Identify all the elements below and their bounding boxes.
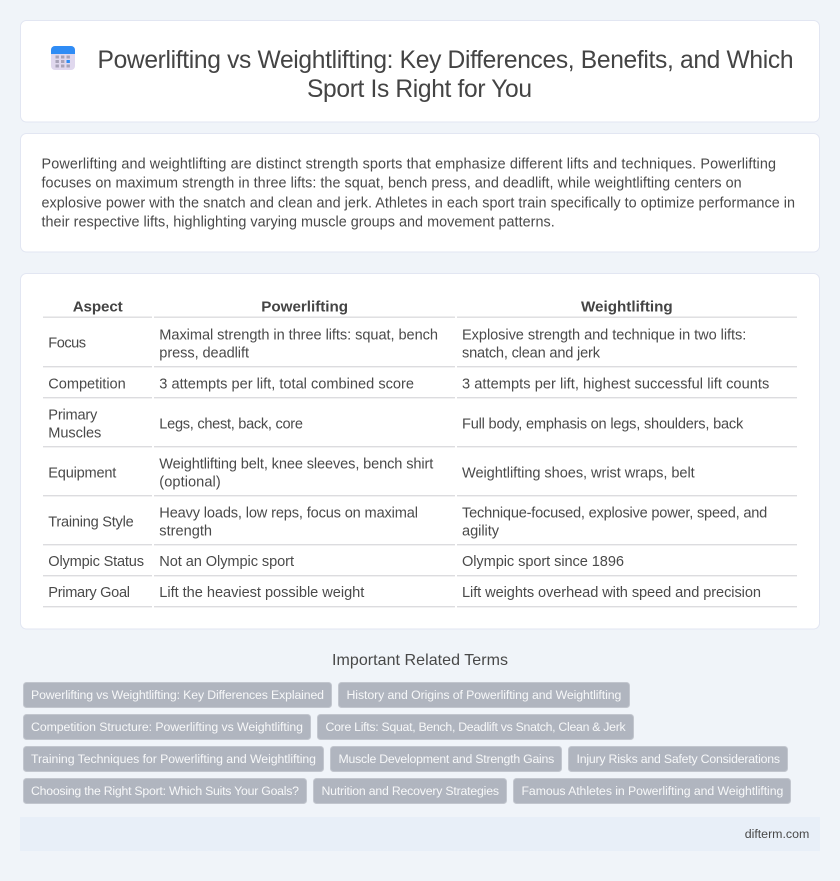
icon: calendar	[51, 46, 75, 70]
tag	[338, 682, 630, 708]
text block: introduction paragraph: their respective lifts, highlighting varying muscle groups and movement patterns.	[42, 215, 555, 231]
tag: Training Techniques for Powerlifting and Weightlifting	[31, 752, 316, 766]
tag: Famous Athletes in Powerlifting and Weightlifting	[522, 784, 783, 798]
table row: competition: Competition	[48, 376, 126, 392]
footer	[20, 817, 820, 851]
panel: introduction	[20, 134, 820, 252]
table row: competition	[43, 376, 797, 398]
table row: equipment: (optional)	[159, 474, 221, 490]
table row: olympic status	[43, 554, 797, 576]
table row: primary goal: Lift weights overhead with speed and precision	[462, 585, 761, 601]
table row: competition: 3 attempts per lift, total combined score	[159, 376, 414, 392]
table row: training style: Technique-focused, explosive power, speed, and	[462, 505, 767, 521]
table row: primary muscles: Full body, emphasis on legs, shoulders, back	[462, 416, 744, 432]
tag	[568, 746, 788, 772]
tag: Choosing the Right Sport: Which Suits Your Goals?	[31, 784, 299, 798]
title: Sport Is Right for You	[307, 76, 532, 103]
tag	[24, 746, 324, 772]
table row: training style	[43, 505, 797, 545]
panel: comparison table	[20, 274, 820, 629]
tag: Muscle Development and Strength Gains	[338, 752, 554, 766]
tag	[24, 682, 332, 708]
tag	[514, 778, 790, 804]
tag	[318, 714, 634, 740]
table row: training style: Heavy loads, low reps, focus on maximal	[159, 505, 418, 521]
title	[98, 47, 794, 103]
text block: introduction paragraph: explosive power with the snatch and clean and jerk. Athletes in each sport train specifically to optimize performance in	[42, 195, 795, 211]
title: Powerlifting vs Weightlifting: Key Differences, Benefits, and Which	[98, 47, 794, 74]
table row: primary muscles: Legs, chest, back, core	[159, 416, 303, 432]
table row: primary muscles	[43, 407, 797, 447]
table row: equipment: Equipment	[48, 465, 116, 481]
table row: equipment: Weightlifting shoes, wrist wraps, belt	[462, 465, 695, 481]
table row: primary goal	[43, 585, 797, 607]
table row: primary muscles: Primary	[48, 407, 98, 423]
text block: introduction paragraph: focuses on maximum strength in three lifts: the squat, bench press, and deadlift, while weightlifting centers on	[42, 176, 742, 192]
tag	[24, 778, 306, 804]
tag: Core Lifts: Squat, Bench, Deadlift vs Snatch, Clean & Jerk	[326, 720, 627, 734]
table row: olympic status: Olympic sport since 1896	[462, 554, 624, 570]
table header row	[43, 299, 797, 318]
tag: Competition Structure: Powerlifting vs Weightlifting	[31, 720, 303, 734]
table row: focus: snatch, clean and jerk	[462, 345, 601, 361]
tag	[330, 746, 562, 772]
tag	[24, 714, 310, 740]
table row: equipment: Weightlifting belt, knee sleeves, bench shirt	[159, 456, 433, 472]
table row: focus: Focus	[48, 335, 86, 351]
table header row: Aspect	[73, 299, 123, 316]
table row: primary goal: Lift the heaviest possible weight	[159, 585, 364, 601]
table row: focus: Maximal strength in three lifts: squat, bench	[159, 327, 438, 343]
table row: equipment	[43, 456, 797, 496]
table row: focus: Explosive strength and technique in two lifts:	[462, 327, 746, 343]
text block: introduction paragraph	[42, 156, 795, 231]
footer: difterm.com	[745, 827, 809, 841]
heading: important related terms: Important Related Terms	[332, 652, 508, 669]
text block: introduction paragraph: Powerlifting and weightlifting are distinct strength sports that emphasize different lifts and techniques. Powerlifting	[42, 156, 776, 172]
tag: Powerlifting vs Weightlifting: Key Differences Explained	[31, 688, 324, 702]
table row: primary muscles: Muscles	[48, 425, 101, 441]
table row: training style: strength	[159, 523, 212, 539]
tag: Injury Risks and Safety Considerations	[576, 752, 780, 766]
table row: competition: 3 attempts per lift, highest successful lift counts	[462, 376, 769, 392]
table header row: Weightlifting	[581, 299, 673, 316]
table row: primary goal: Primary Goal	[48, 585, 130, 601]
panel: related term tags	[24, 682, 790, 804]
tag	[314, 778, 506, 804]
table header row: Powerlifting	[261, 299, 348, 316]
table row: focus	[43, 327, 797, 367]
tag: History and Origins of Powerlifting and Weightlifting	[346, 688, 621, 702]
table row: training style: Training Style	[48, 514, 134, 530]
table row: olympic status: Olympic Status	[48, 554, 144, 570]
table row: olympic status: Not an Olympic sport	[159, 554, 294, 570]
tag: Nutrition and Recovery Strategies	[322, 784, 499, 798]
table row: training style: agility	[462, 523, 500, 539]
table row: focus: press, deadlift	[159, 345, 249, 361]
panel: header	[20, 20, 820, 122]
